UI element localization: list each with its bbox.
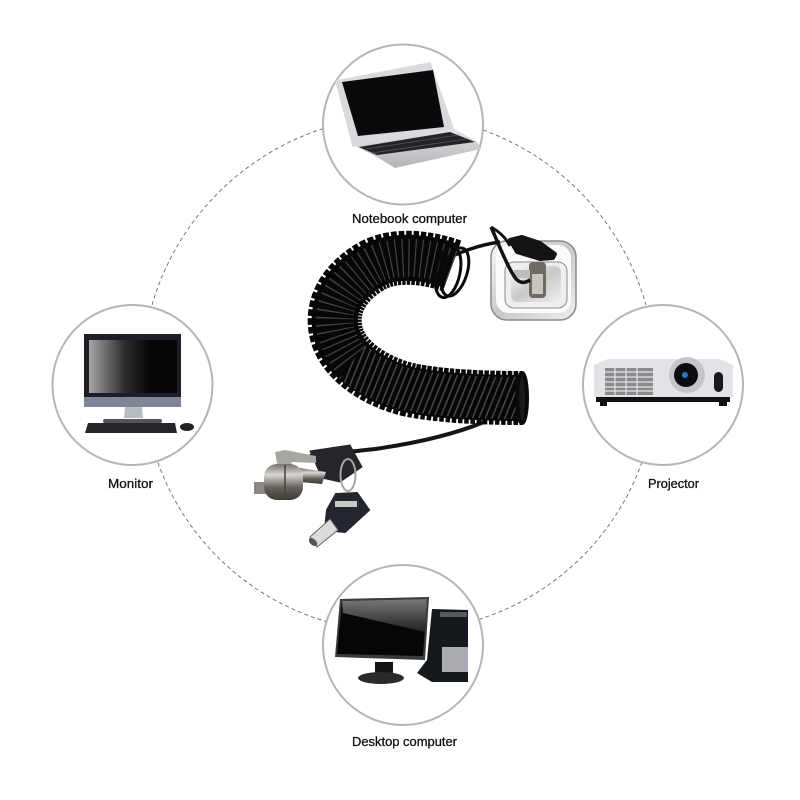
key: [307, 459, 369, 548]
circle: notebook: [323, 44, 483, 204]
dashed connecting ring: [152, 128, 646, 622]
circle: desktop: [323, 565, 483, 725]
thin cable to anchor: [440, 242, 500, 262]
icon: laptop: [336, 63, 481, 168]
panel: monitor: [52, 305, 212, 491]
label: desktop computer: Desktop computer: [352, 734, 458, 749]
lower cable: [310, 422, 484, 456]
icon: projector: [594, 357, 733, 406]
anchor plate: [491, 241, 576, 320]
central product: coiled security cable lock: [254, 227, 576, 548]
panel: projector: [583, 305, 743, 491]
lock head: [254, 445, 362, 500]
panel: notebook computer: [323, 44, 483, 226]
label: notebook computer: Notebook computer: [352, 211, 468, 226]
coil: [335, 244, 527, 423]
circle: monitor: [52, 305, 212, 465]
panel: desktop computer: [323, 565, 483, 749]
label: monitor: Monitor: [108, 476, 154, 491]
label: projector: Projector: [648, 476, 700, 491]
rubber tag and cable loop: [491, 227, 555, 282]
circle: projector: [583, 305, 743, 465]
icon: monitor: [84, 334, 194, 433]
icon: desktop computer: [335, 597, 468, 684]
